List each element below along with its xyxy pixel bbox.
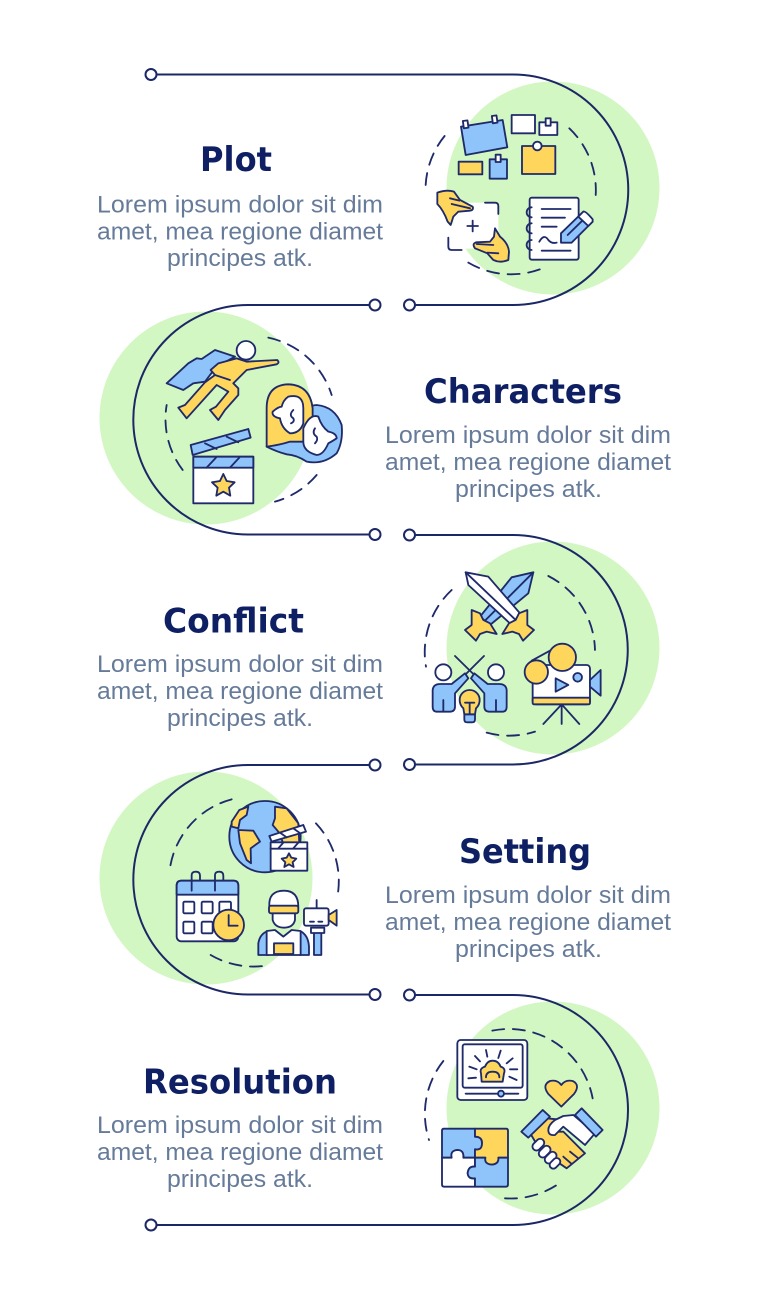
heading: conflict: Conflict bbox=[163, 602, 304, 642]
start node bbox=[370, 300, 380, 310]
connector line bbox=[156, 74, 628, 305]
icon: swords, fencers with bulb and film camera bbox=[425, 572, 601, 736]
panel: setting bbox=[100, 760, 671, 1000]
text block: characters bbox=[385, 422, 671, 503]
icon: superhero, masks and clapperboard bbox=[165, 338, 342, 503]
connector line bbox=[133, 305, 370, 534]
icon: monitor, heart, handshake and puzzle bbox=[425, 1029, 603, 1199]
text block: characters: Lorem ipsum dolor sit dim bbox=[385, 422, 671, 449]
start node bbox=[404, 530, 415, 540]
green circle bbox=[100, 772, 312, 984]
icon: globe, calendar and cameraman bbox=[169, 799, 339, 967]
text block: conflict: amet, mea regione diamet bbox=[97, 678, 383, 705]
end node bbox=[370, 529, 380, 540]
start node bbox=[404, 990, 415, 1000]
text block: characters: amet, mea regione diamet bbox=[385, 449, 671, 476]
connector line bbox=[156, 995, 628, 1225]
heading: plot: Plot bbox=[200, 140, 272, 180]
start node bbox=[146, 69, 156, 80]
text block: plot: principes atk. bbox=[167, 245, 313, 272]
text block: characters: principes atk. bbox=[455, 476, 602, 503]
text block: resolution: amet, mea regione diamet bbox=[97, 1139, 383, 1166]
connector line bbox=[415, 535, 628, 764]
start node bbox=[370, 760, 380, 770]
text block: setting: Lorem ipsum dolor sit dim bbox=[385, 882, 671, 909]
text block: plot bbox=[97, 192, 383, 272]
end node bbox=[370, 989, 380, 1000]
text block: resolution bbox=[97, 1112, 383, 1193]
end node bbox=[404, 759, 415, 770]
text block: conflict: principes atk. bbox=[167, 705, 313, 732]
connector line bbox=[133, 765, 370, 994]
end node bbox=[146, 1220, 156, 1230]
panel: resolution bbox=[97, 990, 660, 1230]
icon: storyboard, framing hands and notebook bbox=[426, 115, 596, 274]
text block: conflict: Lorem ipsum dolor sit dim bbox=[97, 651, 383, 678]
panel: characters bbox=[100, 300, 671, 540]
text block: plot: Lorem ipsum dolor sit dim bbox=[97, 192, 383, 218]
text block: setting bbox=[385, 882, 671, 963]
panel: conflict bbox=[97, 530, 660, 770]
text block: setting: amet, mea regione diamet bbox=[385, 909, 671, 936]
green circle bbox=[100, 312, 312, 524]
green circle bbox=[446, 542, 660, 754]
text block: resolution: Lorem ipsum dolor sit dim bbox=[97, 1112, 383, 1139]
heading: characters: Characters bbox=[424, 372, 622, 412]
panel: plot bbox=[97, 69, 660, 310]
heading: resolution: Resolution bbox=[143, 1062, 337, 1102]
text block: setting: principes atk. bbox=[455, 936, 602, 963]
end node bbox=[404, 300, 415, 310]
green circle bbox=[446, 1002, 660, 1214]
text block: conflict bbox=[97, 651, 383, 732]
green circle bbox=[446, 82, 660, 294]
heading: setting: Setting bbox=[459, 832, 591, 872]
text block: resolution: principes atk. bbox=[167, 1166, 313, 1193]
text block: plot: amet, mea regione diamet bbox=[97, 218, 383, 246]
